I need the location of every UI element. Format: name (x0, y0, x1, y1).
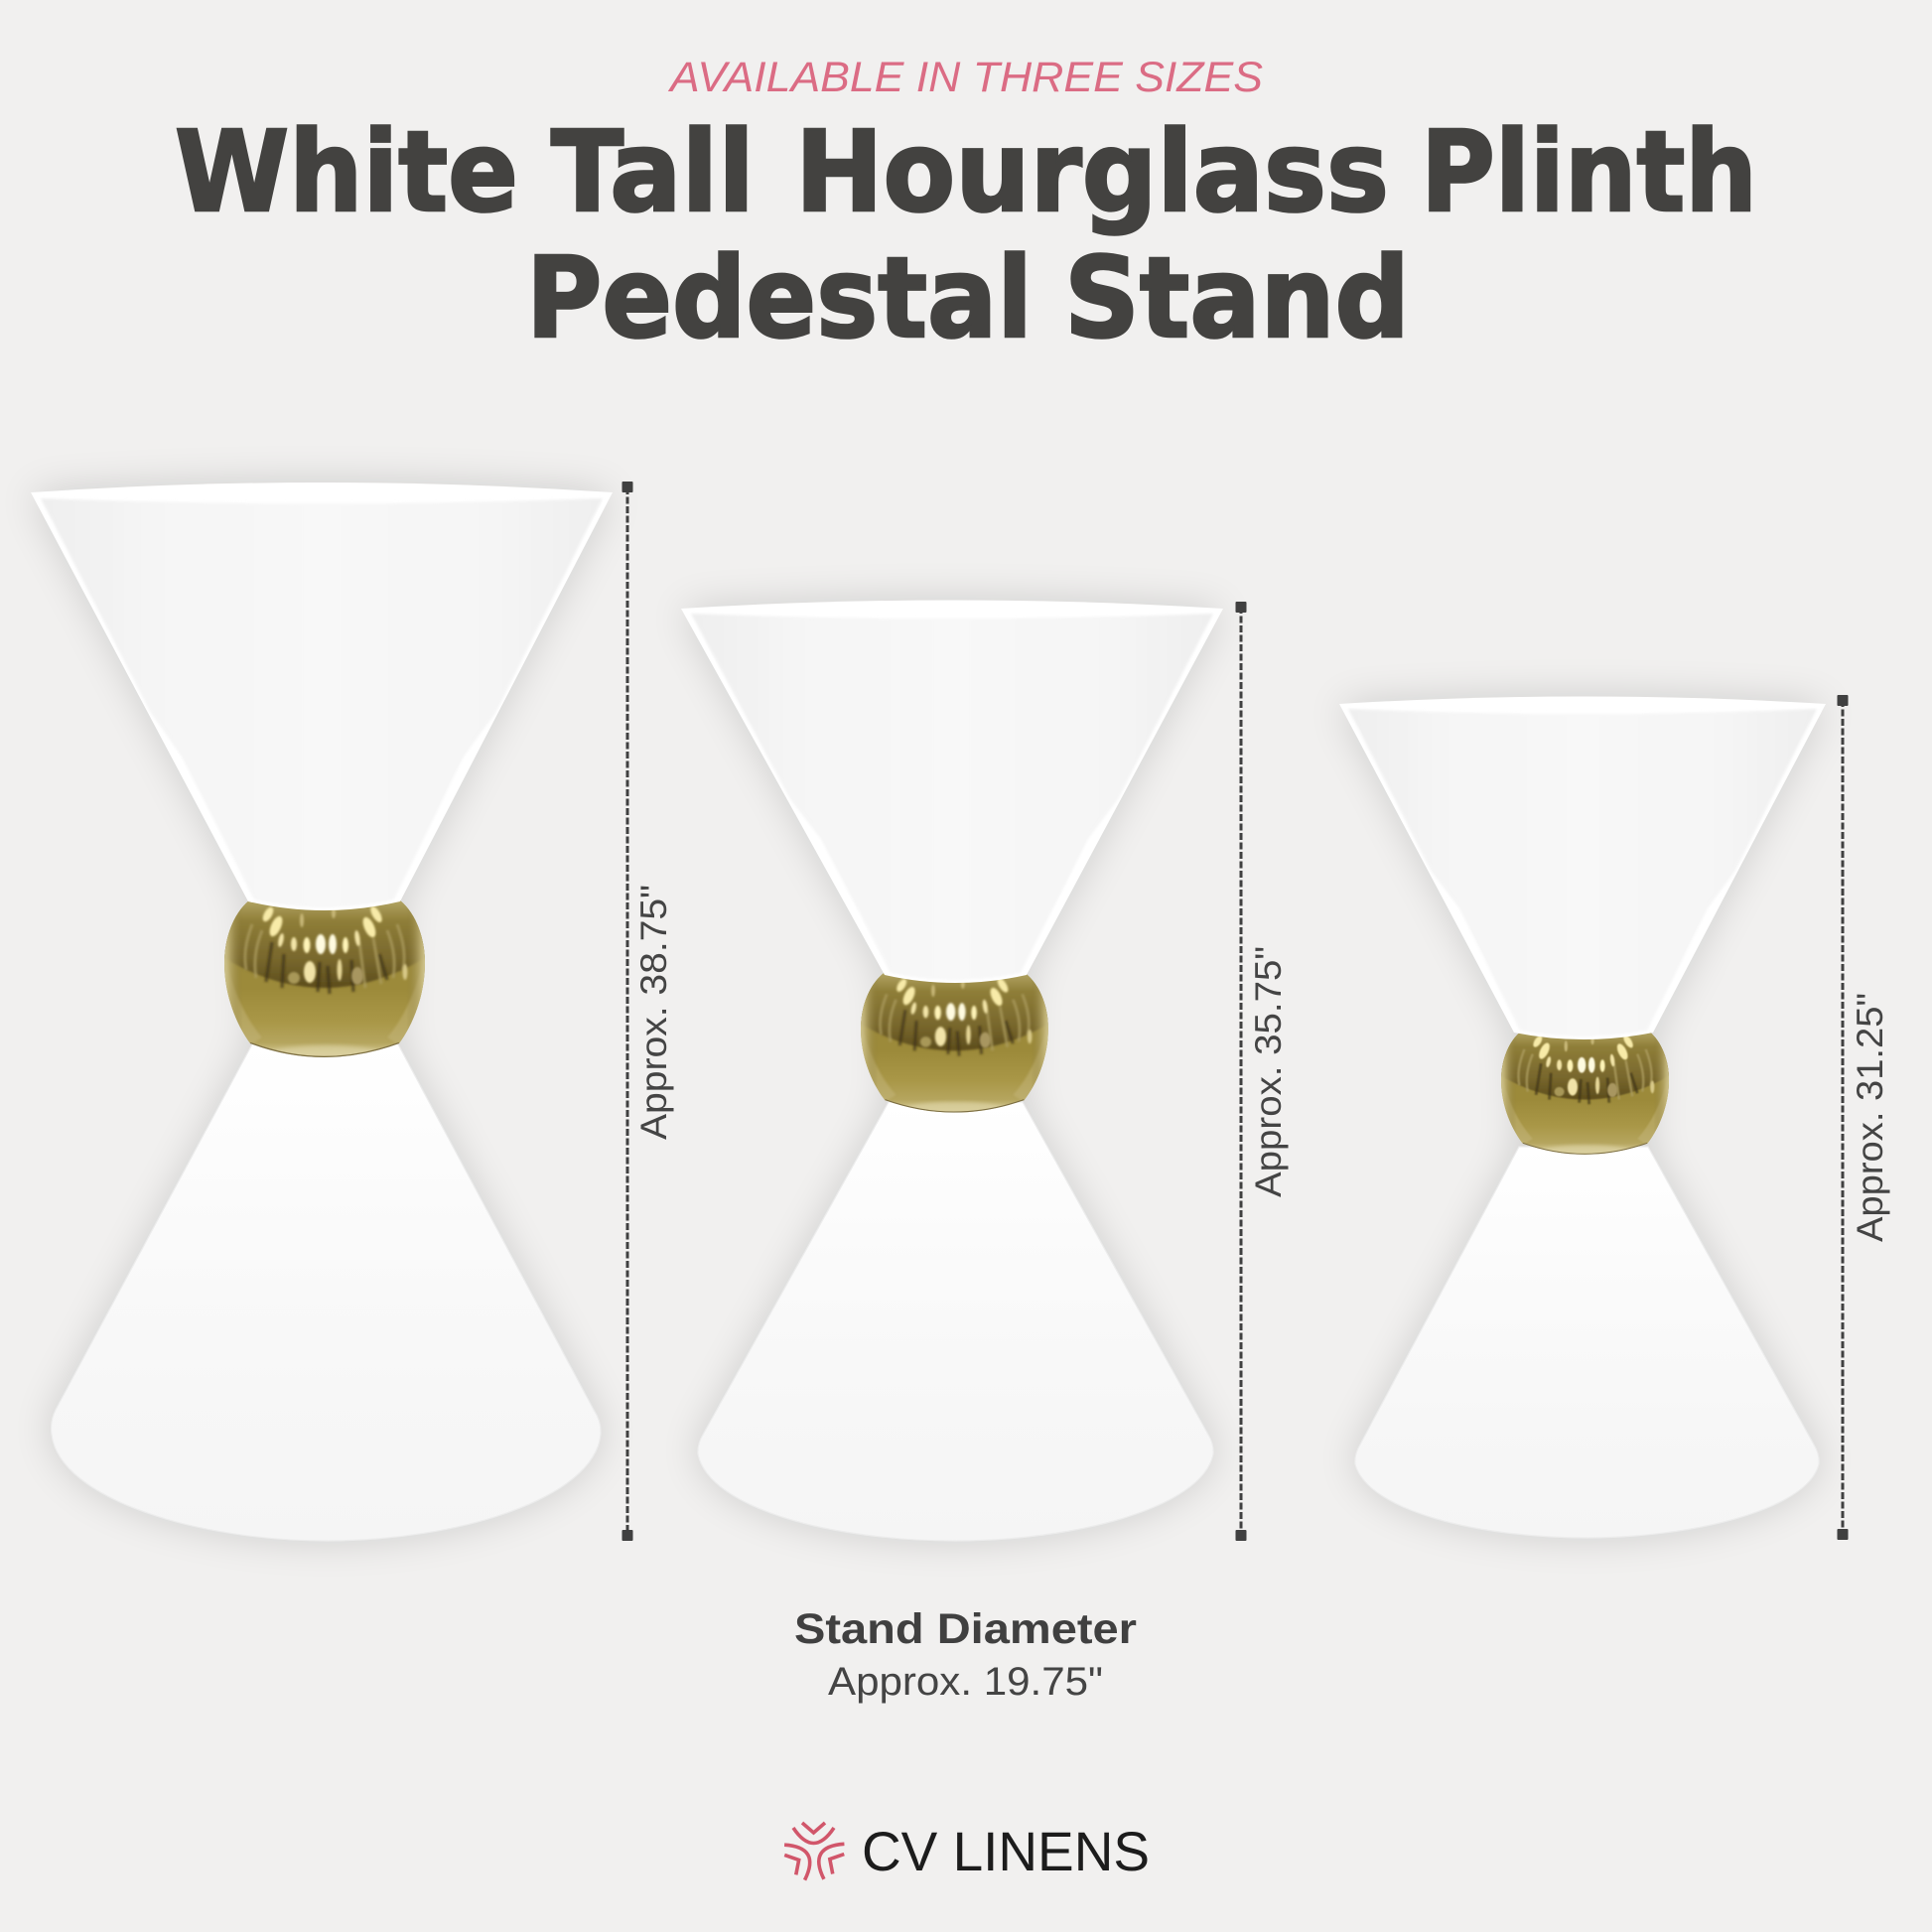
brand name: CV LINENS (862, 1820, 1150, 1882)
gold ball (220, 898, 429, 1073)
upper cone shading (1348, 709, 1817, 1036)
title line 2: Pedestal (526, 233, 1033, 363)
gold ball (1498, 1029, 1672, 1167)
title line 2 (526, 233, 1410, 363)
gold ball (857, 971, 1052, 1127)
icon: logo mark (780, 1823, 849, 1882)
title line 2: Stand (1064, 233, 1410, 363)
upper cone shading (691, 614, 1213, 980)
lower cone (52, 1042, 601, 1541)
title line 1: Plinth (1421, 107, 1757, 237)
stand: small (1339, 695, 1826, 1538)
lower cone (698, 1102, 1213, 1541)
title (175, 107, 1757, 363)
title line 1 (175, 107, 1757, 237)
upper cone shading (41, 498, 603, 907)
title line 1: White (175, 107, 518, 237)
upper cone (31, 483, 613, 910)
height label: 38.75: Approx. 38.75" (633, 885, 674, 1140)
stand: large (31, 482, 613, 1541)
upper cone (681, 600, 1223, 983)
dimension: large (621, 482, 633, 1541)
upper cone (1339, 697, 1826, 1039)
dimension: small (1837, 695, 1849, 1540)
logo (780, 1820, 1150, 1882)
title line 1: Tall (551, 107, 755, 237)
stand: medium (681, 600, 1223, 1541)
height label: 31.25: Approx. 31.25" (1850, 993, 1890, 1242)
height label: 35.75: Approx. 35.75" (1248, 946, 1289, 1197)
lower cone (1355, 1147, 1819, 1538)
stand diameter value: Approx. 19.75" (828, 1660, 1103, 1704)
dimension: medium (1235, 602, 1247, 1541)
title line 1: Hourglass (795, 107, 1389, 237)
subtitle: AVAILABLE IN THREE SIZES (667, 54, 1263, 101)
stand diameter heading: Stand Diameter (794, 1605, 1137, 1653)
